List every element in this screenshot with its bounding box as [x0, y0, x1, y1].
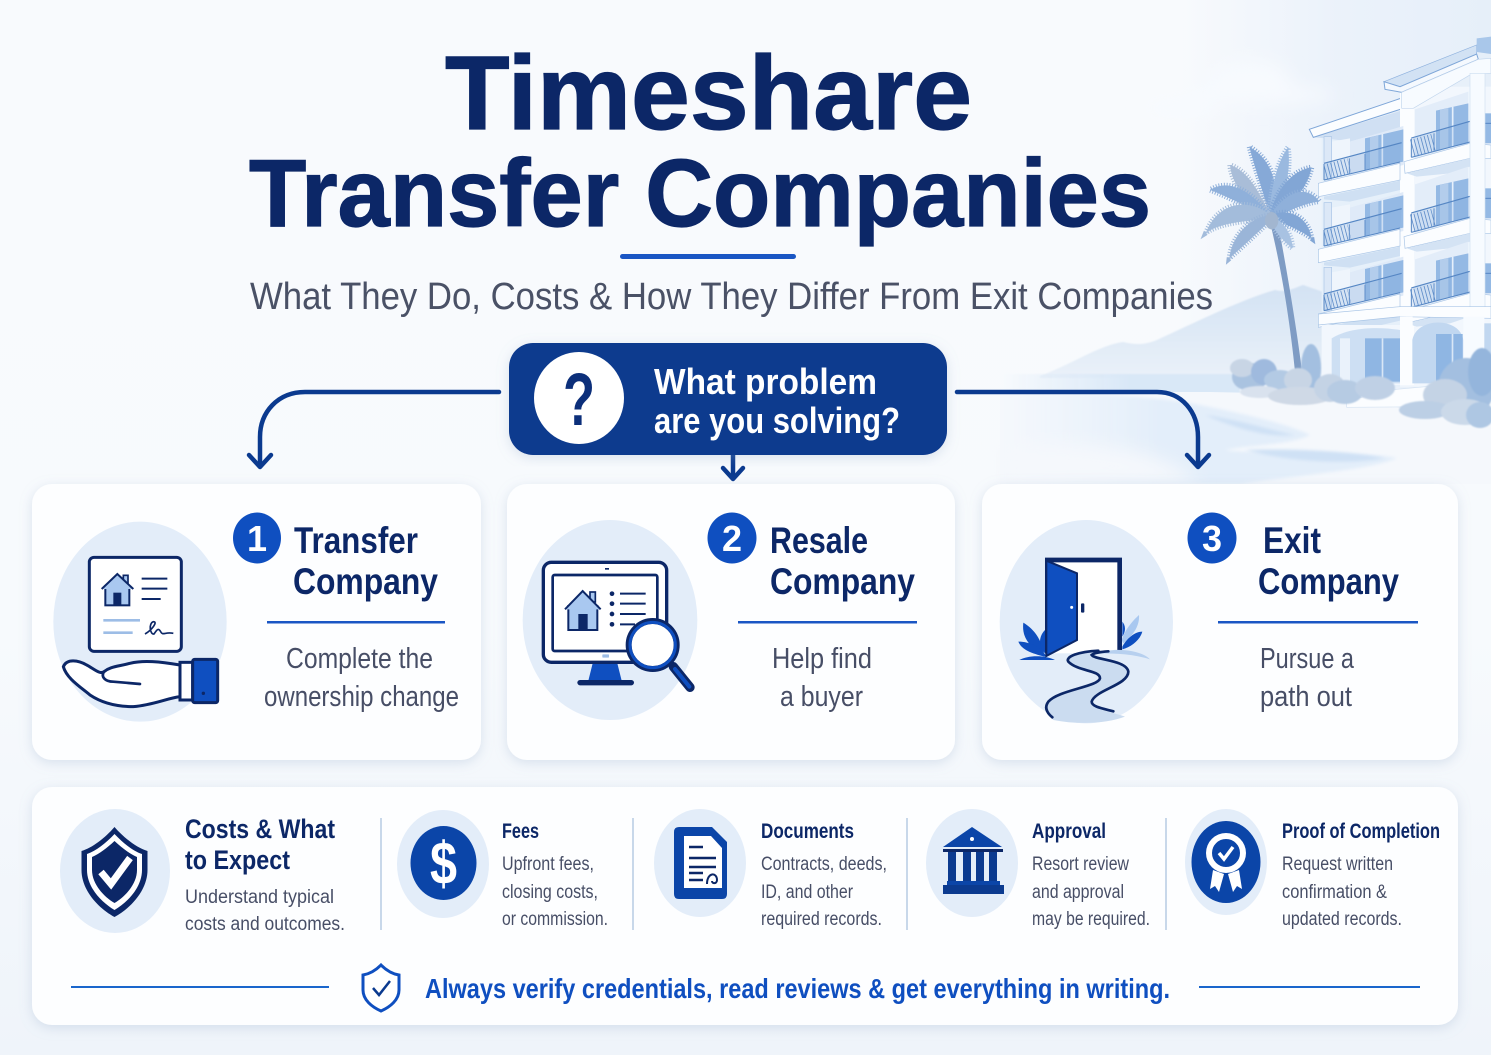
text: fees: Upfront fees,	[502, 854, 594, 875]
text: documents: ID, and other	[761, 882, 854, 903]
description: exit company: path out	[1260, 681, 1352, 713]
description: exit company	[1260, 643, 1355, 713]
arrow: to exit company	[957, 392, 1209, 467]
text: approval: and approval	[1032, 882, 1124, 903]
callout: what problem are you solving: are you solving?	[654, 400, 900, 441]
badge: number 2	[708, 512, 756, 564]
description: resale company	[772, 643, 872, 713]
text: costs and what to expect: costs and outcomes.	[185, 914, 345, 935]
illustration: beach resort with palm tree	[1000, 0, 1491, 484]
arrow: to resale company	[723, 455, 743, 479]
title	[249, 35, 1151, 247]
description: resale company: a buyer	[780, 681, 863, 713]
description: transfer company: Complete the	[286, 643, 433, 675]
palm tree	[1206, 147, 1319, 389]
icon: dollar coin	[397, 810, 489, 918]
icon: monitor listing with magnifier	[523, 520, 697, 720]
panel: costs and what to expect	[32, 787, 1458, 1025]
badge: number 1: 1	[247, 518, 267, 559]
text: approval: Resort review	[1032, 854, 1129, 875]
description: exit company: Pursue a	[1260, 643, 1355, 675]
icon: dollar coin: $	[430, 830, 457, 897]
text: proof of completion: confirmation &	[1282, 882, 1387, 903]
heading: exit company: Company	[1258, 561, 1399, 602]
icon: document	[654, 809, 746, 917]
callout: what problem are you solving: What problem	[654, 361, 877, 402]
text: approval: Approval	[1032, 820, 1106, 843]
icon: outline shield	[363, 965, 399, 1011]
callout: verify credentials: Always verify credentials, read reviews & get everything in writing.	[425, 973, 1170, 1004]
text: proof of completion: updated records.	[1282, 909, 1402, 930]
text: costs and what to expect: to Expect	[185, 845, 290, 875]
text: documents: Contracts, deeds,	[761, 854, 887, 875]
text: proof of completion: Proof of Completion	[1282, 820, 1440, 843]
icon: question mark: ?	[563, 358, 595, 441]
heading: resale company	[770, 520, 915, 602]
callout: what problem are you solving	[509, 343, 947, 455]
heading: transfer company	[293, 520, 438, 602]
text: approval	[1032, 820, 1150, 930]
panel: exit company	[982, 484, 1458, 760]
icon: document on open hand	[53, 522, 227, 722]
heading: resale company: Company	[770, 561, 915, 602]
title underline	[620, 254, 796, 259]
description: resale company: Help find	[772, 643, 872, 675]
title: Transfer Companies	[249, 140, 1151, 247]
text: proof of completion: Request written	[1282, 854, 1393, 875]
badge: number 3: 3	[1202, 518, 1222, 559]
badge: number 1	[233, 512, 281, 564]
text: approval: may be required.	[1032, 909, 1150, 930]
heading: exit company	[1258, 520, 1399, 602]
title: Timeshare	[445, 35, 972, 152]
text: costs and what to expect: Understand typical	[185, 887, 334, 908]
text: documents	[761, 820, 887, 930]
icon: award rosette	[1185, 809, 1267, 915]
hotel building	[1309, 37, 1491, 407]
text: proof of completion	[1282, 820, 1440, 930]
icon: shield with check	[60, 809, 170, 933]
text: fees: closing costs,	[502, 882, 598, 903]
badge: number 3	[1188, 512, 1236, 564]
heading: transfer company: Transfer	[294, 520, 418, 561]
text: fees: or commission.	[502, 909, 608, 930]
icon: open door and winding path	[1000, 520, 1173, 723]
shrubs	[1230, 344, 1491, 428]
panel: transfer company	[32, 484, 481, 760]
text: fees: Fees	[502, 820, 539, 843]
description: transfer company: ownership change	[264, 681, 459, 713]
icon: question mark	[534, 352, 624, 444]
panel: resale company	[507, 484, 955, 760]
text: documents: Documents	[761, 820, 854, 843]
description: transfer company	[264, 643, 459, 713]
badge: number 2: 2	[722, 518, 742, 559]
text: costs and what to expect	[185, 814, 345, 935]
text: fees	[502, 820, 608, 930]
text: documents: required records.	[761, 909, 882, 930]
arrow: to transfer company	[249, 392, 499, 467]
subtitle: What They Do, Costs & How They Differ From Exit Companies	[250, 276, 1213, 318]
heading: exit company: Exit	[1263, 520, 1321, 561]
heading: resale company: Resale	[770, 520, 868, 561]
text: costs and what to expect: Costs & What	[185, 814, 335, 844]
heading: transfer company: Company	[293, 561, 438, 602]
icon: institution building	[926, 809, 1018, 917]
